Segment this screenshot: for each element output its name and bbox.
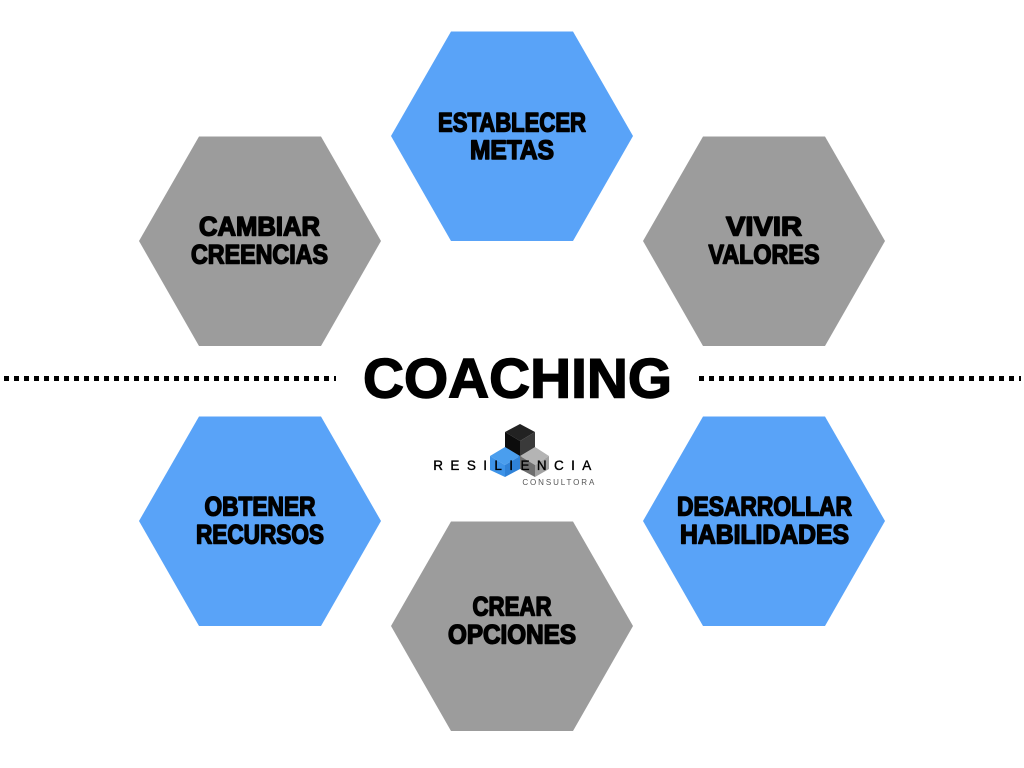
logo: Resiliencia Consultora: RESILIENCIA: [433, 458, 599, 473]
logo: Resiliencia Consultora: [433, 424, 599, 487]
hexagon: Desarrollar habilidades: HABILIDADES: [680, 520, 849, 550]
hexagon: Vivir valores: VALORES: [708, 240, 820, 270]
right dotted divider: [699, 376, 1021, 381]
hexagon: Vivir valores: VIVIR: [726, 212, 802, 242]
hexagon: Cambiar creencias: CAMBIAR: [199, 212, 320, 242]
logo: Resiliencia Consultora: CONSULTORA: [522, 478, 596, 487]
hexagon: Cambiar creencias: CREENCIAS: [191, 240, 328, 270]
hexagon: Establecer metas: METAS: [470, 135, 554, 165]
icon: stacked cubes: [490, 424, 549, 477]
hexagon: Cambiar creencias: [139, 136, 381, 346]
hexagon: Obtener recursos: [139, 416, 381, 626]
hexagon: Desarrollar habilidades: DESARROLLAR: [677, 492, 852, 522]
hexagon: Vivir valores: [643, 136, 885, 346]
left dotted divider: [4, 376, 336, 381]
hexagon: Obtener recursos: RECURSOS: [196, 520, 324, 550]
hexagon: Obtener recursos: OBTENER: [204, 492, 316, 522]
hexagon: Crear opciones: CREAR: [472, 592, 552, 622]
hexagon: Crear opciones: [391, 522, 633, 731]
hexagon: Desarrollar habilidades: [643, 416, 885, 626]
hexagon: Establecer metas: ESTABLECER: [438, 107, 586, 137]
hexagon: Establecer metas: [391, 32, 633, 241]
hexagon: Crear opciones: OPCIONES: [448, 620, 576, 650]
title: COACHING: [363, 346, 672, 410]
